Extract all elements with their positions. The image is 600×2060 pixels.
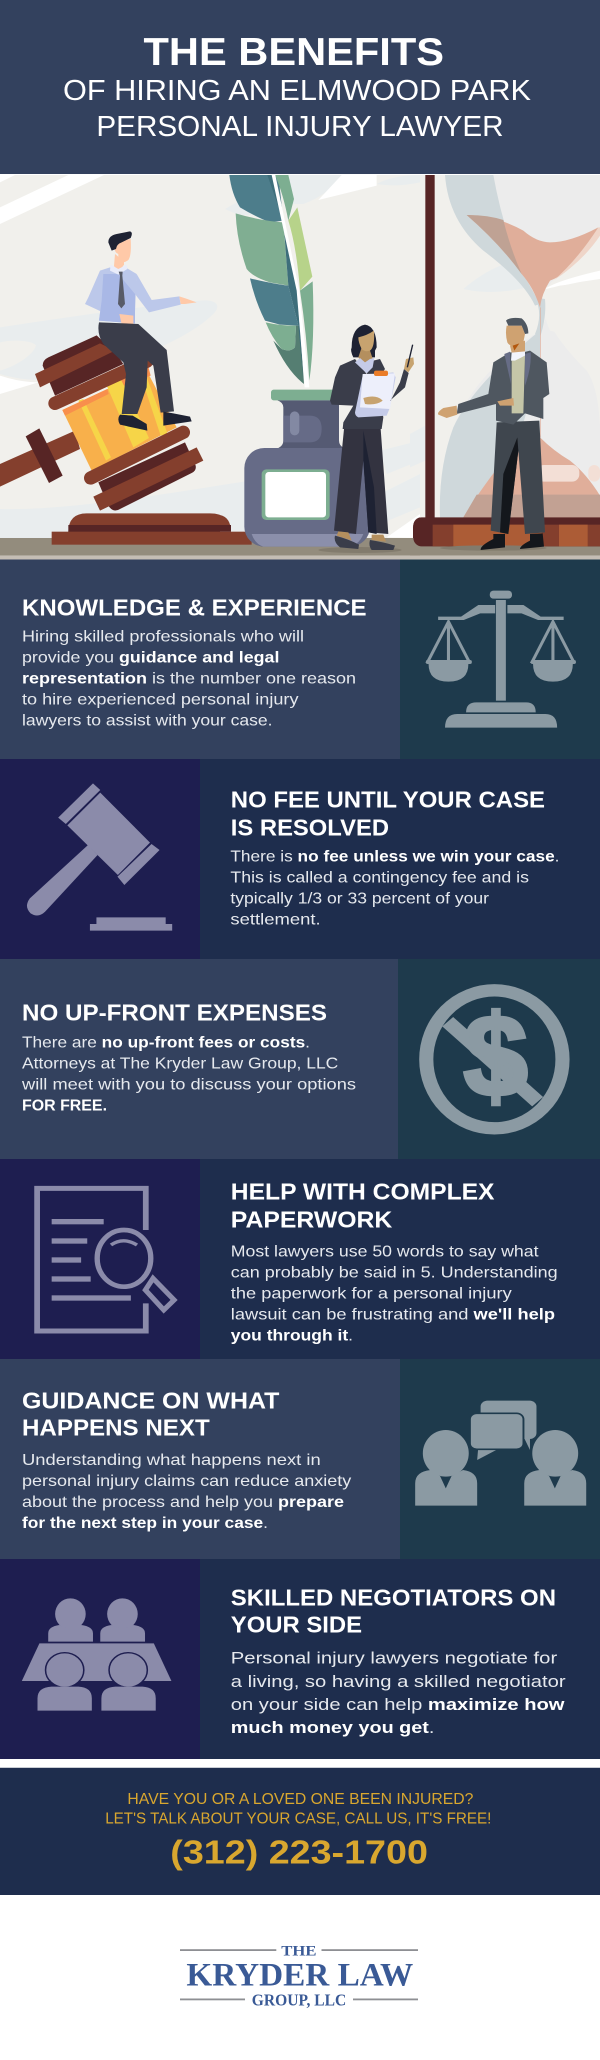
panel: no up-front expenses xyxy=(0,959,600,1159)
body text: a living, so having a skilled negotiator xyxy=(231,1672,566,1691)
panel: guidance on what happens next xyxy=(0,1359,600,1559)
body text: to hire experienced personal injury xyxy=(22,692,298,709)
body text: you through it . xyxy=(231,1328,353,1345)
woman with clipboard xyxy=(318,325,414,553)
body text xyxy=(231,1649,566,1737)
body text xyxy=(22,629,356,730)
body text: on your side can help maximize how xyxy=(231,1695,565,1714)
heading: NO FEE UNTIL YOUR CASE xyxy=(231,786,545,812)
heading: IS RESOLVED xyxy=(231,814,389,840)
body text: Hiring skilled professionals who will xyxy=(22,629,304,646)
body text: about the process and help you prepare xyxy=(22,1494,344,1511)
panel: knowledge and experience xyxy=(0,560,600,759)
standing man xyxy=(438,318,549,551)
body text xyxy=(231,1244,558,1345)
icon: two people talking xyxy=(415,1401,586,1506)
heading: YOUR SIDE xyxy=(231,1612,362,1638)
body text: provide you guidance and legal xyxy=(22,650,279,667)
logo: The Kryder Law Group, LLC: KRYDER LAW xyxy=(186,1958,413,1994)
heading: HELP WITH COMPLEX xyxy=(231,1178,495,1204)
quill feather xyxy=(229,175,313,387)
body text: representation is the number one reason xyxy=(22,671,356,688)
body text: lawyers to assist with your case. xyxy=(22,713,272,730)
body text: will meet with you to discuss your options xyxy=(21,1077,356,1094)
body text: personal injury claims can reduce anxiety xyxy=(22,1473,351,1490)
phone number: (312) 223-1700 xyxy=(170,1833,428,1870)
body text xyxy=(230,849,560,929)
body text: Personal injury lawyers negotiate for xyxy=(231,1649,558,1668)
subtitle: PERSONAL INJURY LAWYER xyxy=(96,111,504,143)
icon: scales of justice xyxy=(426,591,576,728)
heading xyxy=(231,1585,556,1638)
ink bottle xyxy=(244,390,370,547)
body text: can probably be said in 5. Understanding xyxy=(231,1265,558,1282)
scene: hourglass and man xyxy=(410,175,600,560)
body text: Understanding what happens next in xyxy=(22,1452,321,1469)
icon: gavel xyxy=(27,783,172,931)
heading: NO UP-FRONT EXPENSES xyxy=(22,999,327,1025)
body text: Attorneys at The Kryder Law Group, LLC xyxy=(22,1056,338,1073)
icon: document with magnifier xyxy=(37,1188,174,1331)
heading: GUIDANCE ON WHAT xyxy=(22,1388,279,1414)
panel: skilled negotiators xyxy=(0,1559,600,1759)
heading: HAPPENS NEXT xyxy=(22,1415,210,1441)
icon: no dollar sign xyxy=(426,990,562,1128)
hourglass xyxy=(413,175,600,546)
scene: gavel and seated man xyxy=(0,175,260,560)
heading: KNOWLEDGE & EXPERIENCE xyxy=(22,595,367,621)
logo: The Kryder Law Group, LLC: THE xyxy=(281,1944,316,1960)
body text: the paperwork for a personal injury xyxy=(231,1286,512,1303)
heading: SKILLED NEGOTIATORS ON xyxy=(231,1585,556,1611)
panel: help with paperwork xyxy=(0,1159,600,1359)
scene: quill, ink bottle and woman xyxy=(220,175,420,560)
panel: no fee until resolved xyxy=(0,759,600,959)
call to action text xyxy=(105,1791,491,1827)
body text: There is no fee unless we win your case . xyxy=(230,849,560,866)
gavel xyxy=(0,335,252,545)
icon: no dollar sign: $ xyxy=(463,991,528,1121)
subtitle: OF HIRING AN ELMWOOD PARK xyxy=(63,75,531,107)
heading xyxy=(231,786,545,840)
body text: settlement. xyxy=(230,912,321,929)
logo: The Kryder Law Group, LLC: GROUP, LLC xyxy=(252,1991,346,2010)
heading xyxy=(22,1388,279,1441)
body text: Most lawyers use 50 words to say what xyxy=(231,1244,539,1261)
heading xyxy=(231,1178,495,1232)
body text: typically 1/3 or 33 percent of your xyxy=(230,891,490,908)
body text: This is called a contingency fee and is xyxy=(230,870,529,887)
header banner xyxy=(0,0,600,174)
heading: PAPERWORK xyxy=(231,1206,393,1232)
call to action banner xyxy=(0,1767,600,1895)
call to action text: HAVE YOU OR A LOVED ONE BEEN INJURED? xyxy=(127,1791,474,1808)
body text xyxy=(21,1035,356,1115)
subtitle xyxy=(63,75,531,143)
title: THE BENEFITS xyxy=(144,31,444,74)
call to action text: LET'S TALK ABOUT YOUR CASE, CALL US, IT'S FREE! xyxy=(105,1810,491,1827)
seated man xyxy=(85,231,197,431)
body text: much money you get . xyxy=(231,1718,434,1737)
body text: There are no up-front fees or costs . xyxy=(22,1035,310,1052)
logo: The Kryder Law Group, LLC xyxy=(180,1944,418,2010)
body text: lawsuit can be frustrating and we'll help xyxy=(231,1307,555,1324)
body text: for the next step in your case . xyxy=(22,1515,268,1532)
body text: FOR FREE. xyxy=(22,1098,107,1115)
hero illustration xyxy=(0,175,600,560)
body text xyxy=(22,1452,351,1532)
icon: negotiation table xyxy=(22,1598,171,1711)
